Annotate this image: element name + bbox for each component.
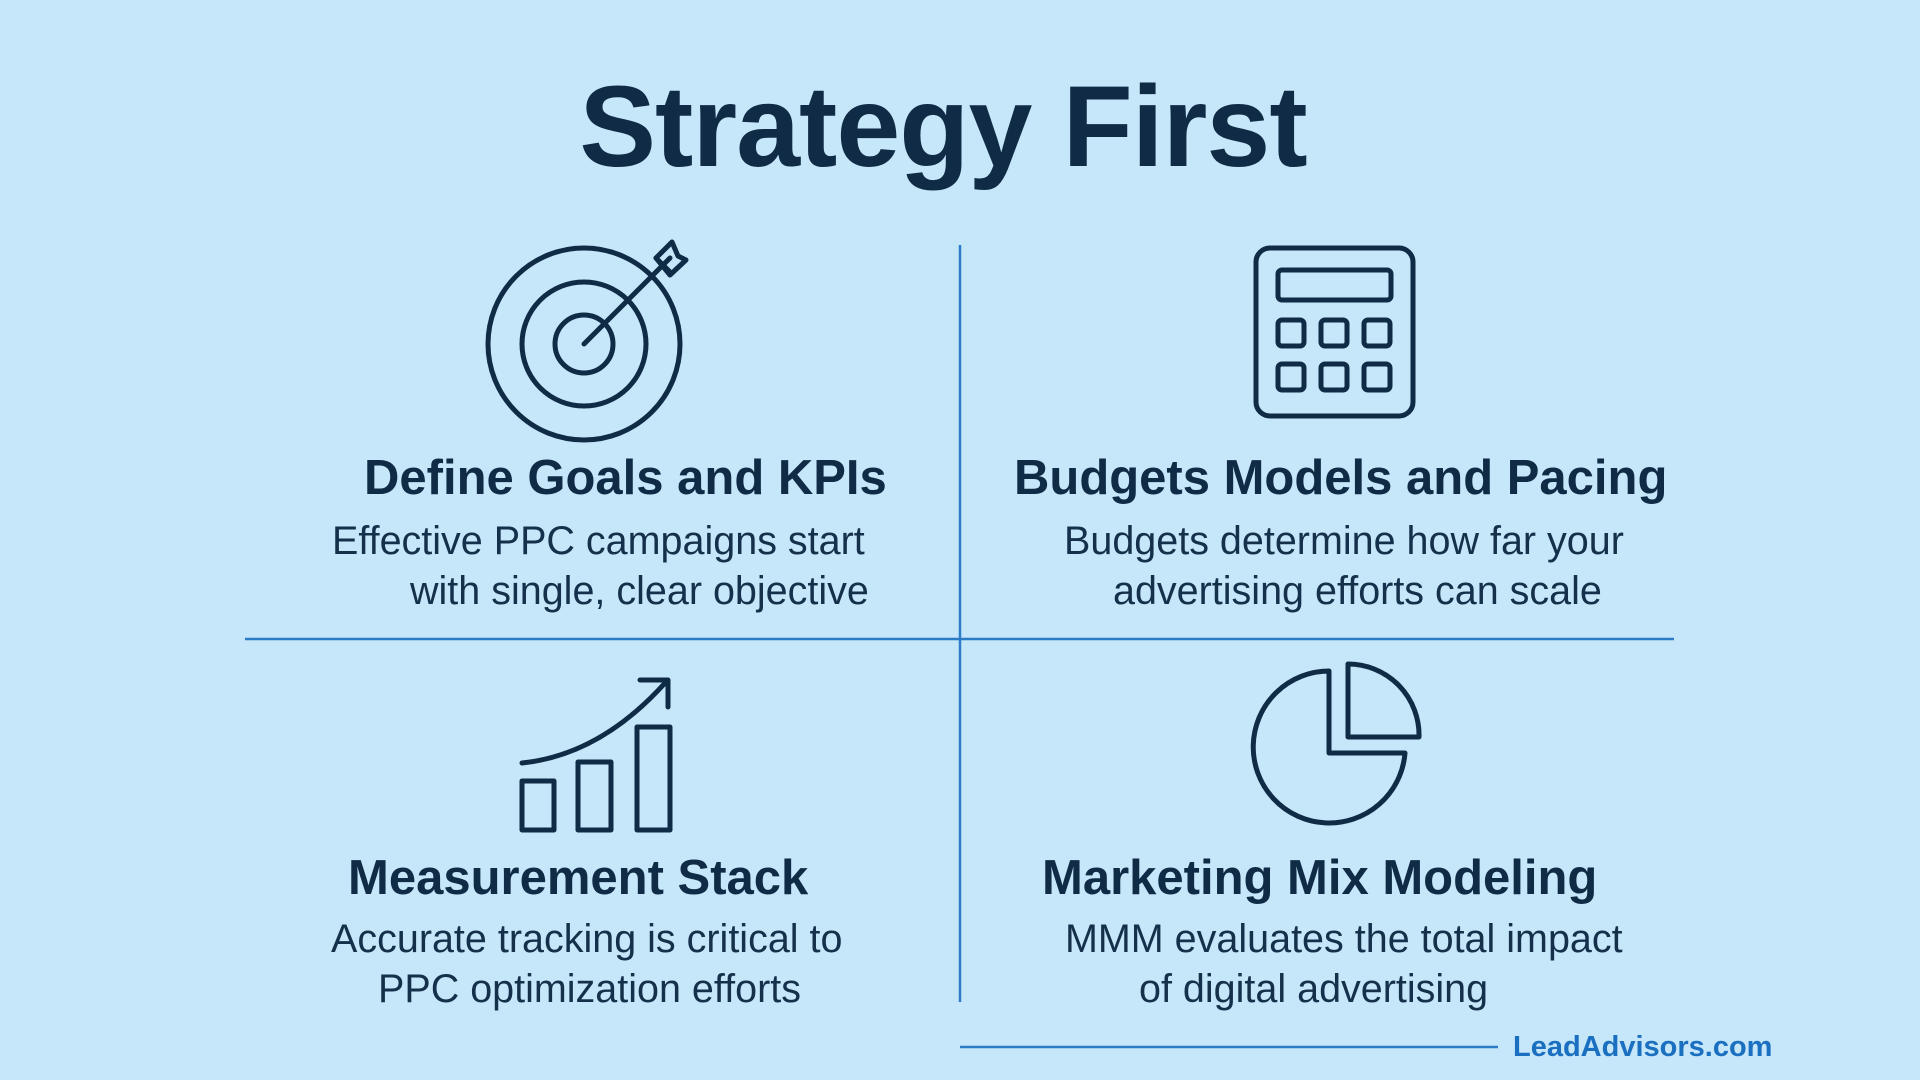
text: advertising efforts can scale xyxy=(1113,569,1602,613)
panel: mmm xyxy=(1042,851,1623,1011)
text xyxy=(331,917,842,1011)
heading: Define Goals and KPIs xyxy=(364,451,887,505)
text: MMM evaluates the total impact xyxy=(1065,917,1623,961)
text: with single, clear objective xyxy=(410,569,869,613)
text xyxy=(1065,917,1623,1011)
panel: measurement xyxy=(331,851,842,1011)
text xyxy=(1064,519,1624,613)
text xyxy=(332,519,869,613)
heading: Marketing Mix Modeling xyxy=(1042,851,1597,905)
text: of digital advertising xyxy=(1139,967,1488,1011)
text: PPC optimization efforts xyxy=(378,967,801,1011)
text: Effective PPC campaigns start xyxy=(332,519,865,563)
heading: Budgets Models and Pacing xyxy=(1014,451,1667,505)
brand: LeadAdvisors.com xyxy=(1513,1031,1772,1063)
panel: goals xyxy=(332,451,887,613)
title: Strategy First xyxy=(579,63,1307,191)
text: Budgets determine how far your xyxy=(1064,519,1624,563)
heading: Measurement Stack xyxy=(348,851,808,905)
panel: budgets xyxy=(1014,451,1667,613)
text: Accurate tracking is critical to xyxy=(331,917,842,961)
